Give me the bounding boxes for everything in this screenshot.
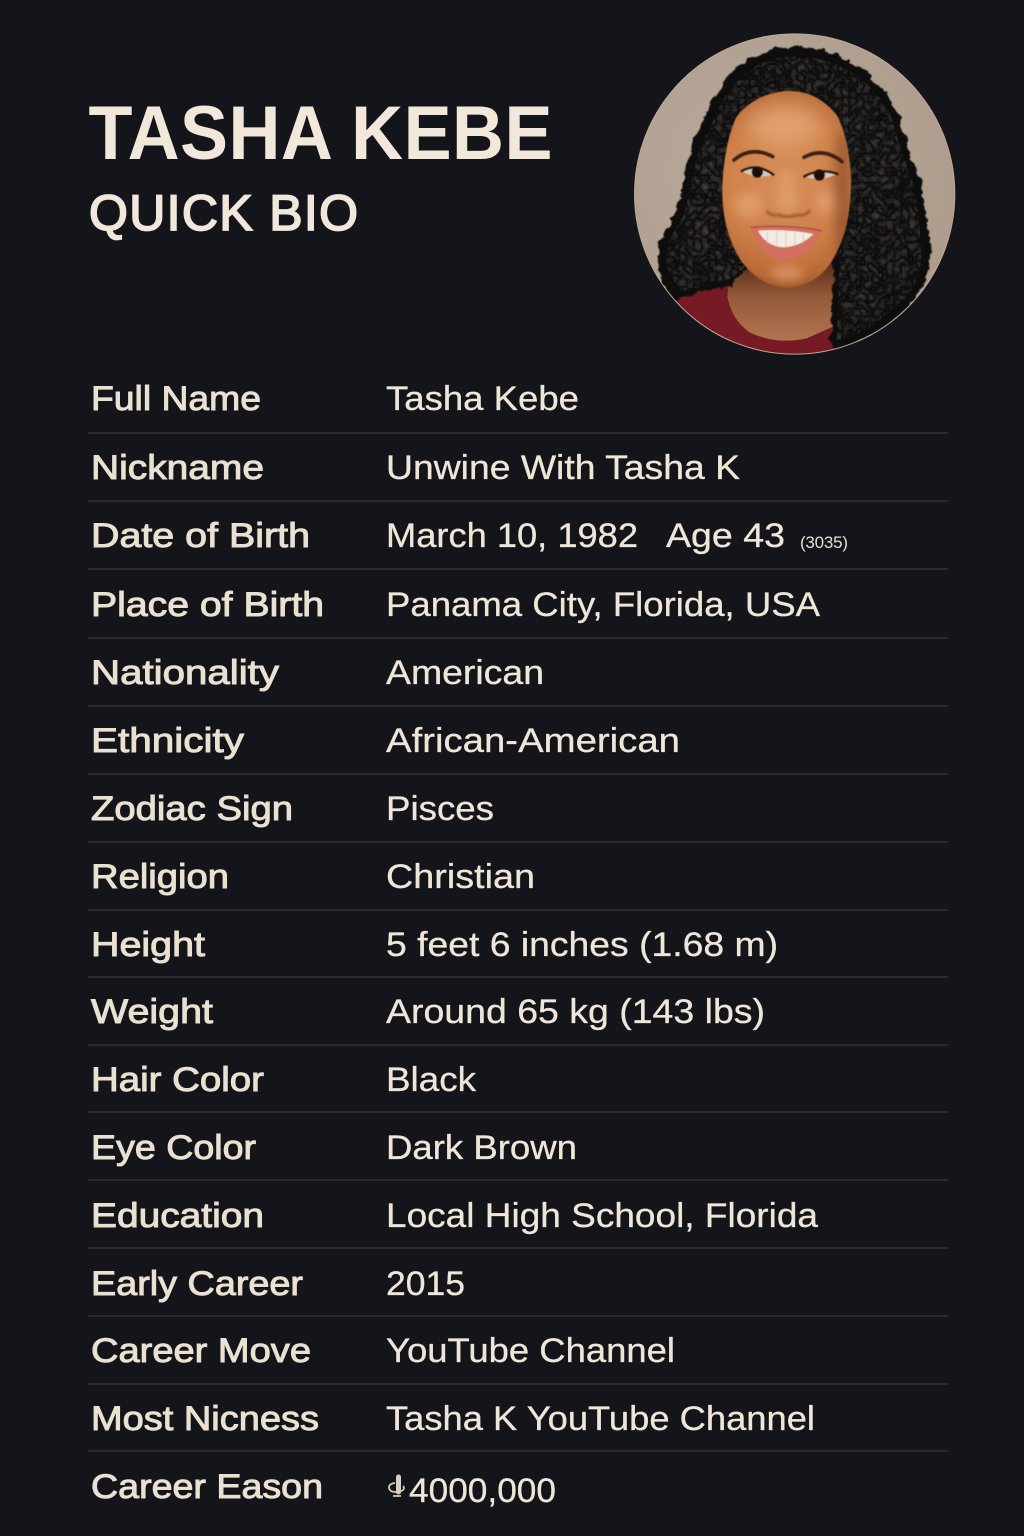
row: date of birth (91, 517, 848, 555)
row: education: Local High School, Florida (386, 1197, 818, 1235)
hair curls (666, 57, 922, 340)
row: nickname (91, 449, 740, 487)
row: ethnicity (91, 722, 680, 760)
row: nationality (91, 654, 544, 692)
row: religion: Christian (386, 858, 535, 896)
forehead highlight (748, 107, 822, 147)
row: nationality: Nationality (91, 654, 280, 692)
row: full name: Tasha Kebe (386, 380, 579, 418)
smile (751, 226, 822, 260)
nose (765, 197, 812, 218)
title: TASHA KEBE (88, 90, 552, 175)
row: date of birth: March 10, 1982 (386, 517, 638, 555)
row: nickname: Nickname (91, 449, 264, 487)
face (722, 91, 851, 288)
row: career move: YouTube Channel (386, 1332, 675, 1370)
row: full name: Full Name (91, 380, 261, 418)
brows (734, 152, 842, 162)
row: career eason: 4000,000 (409, 1472, 556, 1510)
row: religion (91, 858, 535, 896)
row: early career (91, 1265, 465, 1303)
row: ethnicity: Ethnicity (91, 722, 245, 760)
row: zodiac sign: Zodiac Sign (91, 790, 293, 828)
row: date of birth: (3035) (800, 533, 848, 552)
shirt (667, 285, 844, 354)
bio table (88, 380, 948, 1510)
row: zodiac sign (91, 790, 494, 828)
neck (727, 260, 836, 341)
row: eye color (91, 1129, 577, 1167)
row: religion: Religion (91, 858, 229, 896)
row: height (91, 926, 778, 964)
row: place of birth: Panama City, Florida, USA (386, 586, 820, 624)
row: most nicness: Tasha K YouTube Channel (386, 1400, 815, 1438)
row: place of birth: Place of Birth (91, 586, 324, 624)
row: education: Education (91, 1197, 264, 1235)
row: height: Height (91, 926, 205, 964)
subtitle: QUICK BIO (89, 185, 358, 241)
backdrop (635, 34, 954, 304)
row: date of birth: Age 43 (666, 517, 785, 555)
row: height: 5 feet 6 inches (1.68 m) (386, 926, 778, 964)
row: hair color: Hair Color (91, 1061, 264, 1099)
eyes (741, 166, 838, 181)
row: hair color (91, 1061, 477, 1099)
row: weight (91, 993, 765, 1031)
row: nationality: American (386, 654, 544, 692)
row: most nicness: Most Nicness (91, 1400, 319, 1438)
row: eye color: Eye Color (91, 1129, 256, 1167)
row: nickname: Unwine With Tasha K (386, 449, 740, 487)
row: early career: Early Career (91, 1265, 303, 1303)
hair mass (657, 47, 929, 348)
row: weight: Around 65 kg (143 lbs) (386, 993, 765, 1031)
row: career move (91, 1332, 675, 1370)
row: date of birth: Date of Birth (91, 517, 310, 555)
row: career eason: Career Eason (91, 1468, 323, 1506)
row: early career: 2015 (386, 1265, 465, 1303)
portrait photo (630, 30, 960, 360)
row: ethnicity: African-American (386, 722, 680, 760)
row: zodiac sign: Pisces (386, 790, 494, 828)
row: career move: Career Move (91, 1332, 311, 1370)
row: weight: Weight (91, 993, 213, 1031)
icon: microphone currency glyph (389, 1477, 404, 1496)
row: place of birth (91, 586, 820, 624)
row: eye color: Dark Brown (386, 1129, 577, 1167)
row: career eason (91, 1468, 556, 1510)
row: education (91, 1197, 818, 1235)
row: full name (91, 380, 579, 418)
side shade (833, 130, 852, 257)
row: most nicness (91, 1400, 815, 1438)
row: hair color: Black (386, 1061, 477, 1099)
cheek highlights (734, 168, 842, 281)
